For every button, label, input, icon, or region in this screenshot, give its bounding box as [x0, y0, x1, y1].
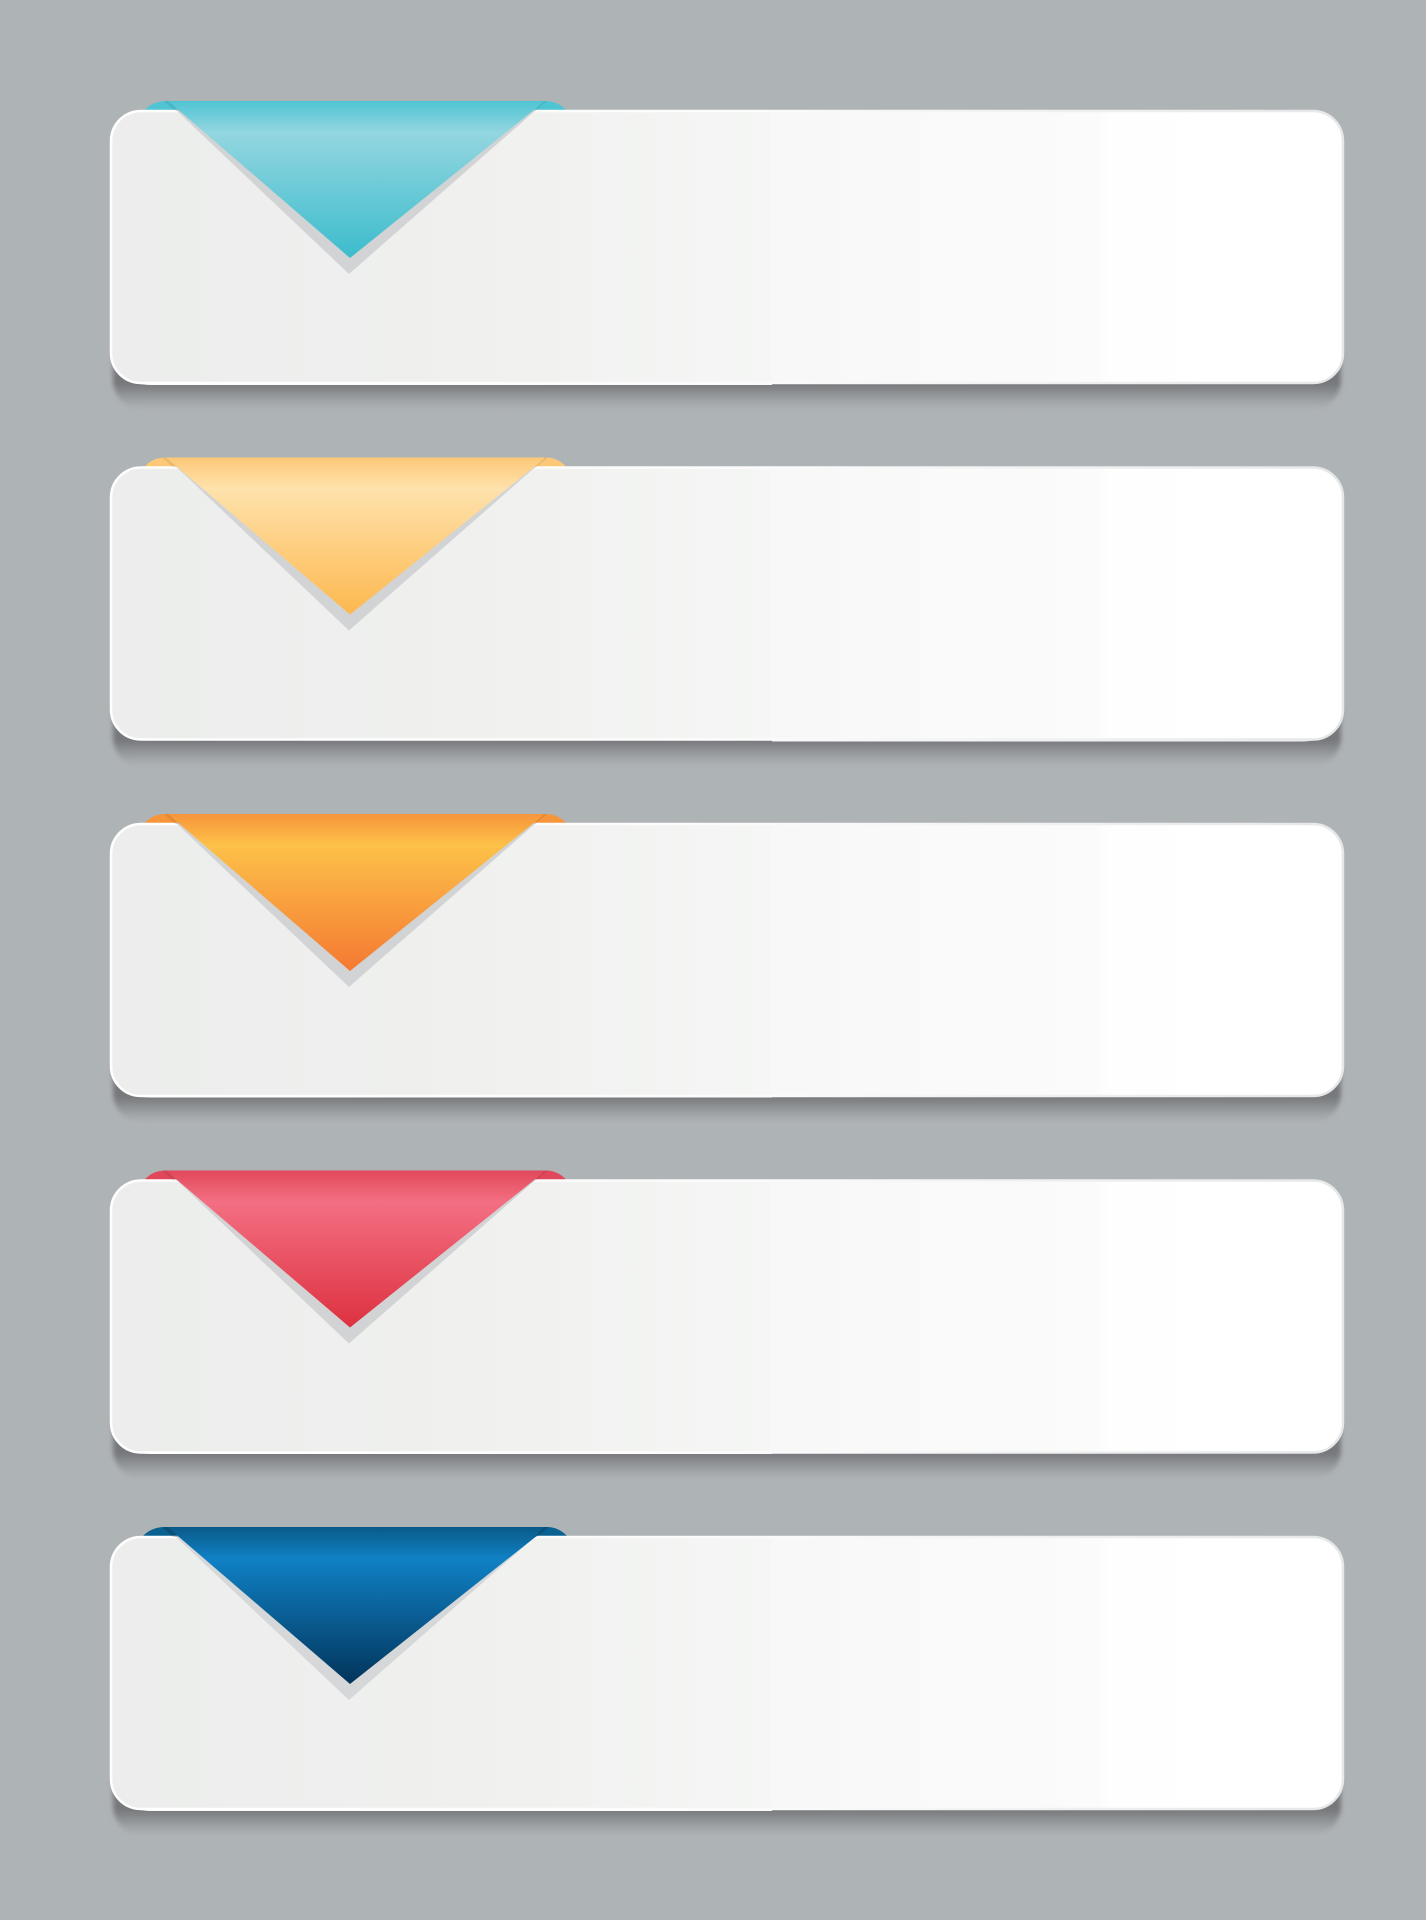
card 2 ribbon back	[144, 458, 567, 468]
card 4 ribbon triangle	[166, 1170, 546, 1328]
card 3 ribbon left fold	[164, 814, 180, 824]
card 1 left bottom seam strip	[132, 382, 772, 385]
panel: card 1 teal	[111, 101, 1343, 410]
card 3 body	[111, 824, 1343, 1096]
card 4 drop shadow	[113, 1400, 1341, 1480]
card 5 left bottom seam strip	[132, 1808, 772, 1811]
card 1 ribbon shadow	[176, 110, 536, 274]
card 5 ribbon back	[142, 1527, 568, 1537]
card 2 right bottom seam strip	[772, 738, 1322, 742]
card 5 ribbon shadow	[175, 1536, 536, 1700]
panel: card 2 amber	[111, 458, 1343, 768]
card 2 ribbon shadow	[176, 466, 536, 630]
card 3 ribbon back	[144, 814, 567, 824]
card 1 ribbon triangle	[168, 101, 545, 258]
card 5 drop shadow	[113, 1756, 1341, 1836]
card 3 ribbon shadow	[176, 823, 536, 987]
card 2 ribbon left fold	[162, 458, 178, 468]
card 2 drop shadow	[113, 686, 1341, 768]
card 2 body	[111, 468, 1343, 740]
card 1 body	[111, 111, 1343, 383]
card 4 left bottom seam strip	[132, 1452, 772, 1454]
card 3 ribbon triangle	[168, 814, 545, 971]
card 3 left bottom seam strip	[132, 1095, 772, 1098]
card 1 drop shadow	[113, 330, 1341, 410]
card 1 ribbon right fold	[533, 101, 547, 111]
panel: card 3 orange	[111, 814, 1343, 1123]
card 3 drop shadow	[113, 1043, 1341, 1123]
card 4 body	[111, 1180, 1343, 1452]
card 4 ribbon right fold	[534, 1170, 548, 1180]
panel: card 5 blue	[111, 1527, 1343, 1836]
card 5 ribbon right fold	[534, 1527, 549, 1537]
card 4 ribbon left fold	[162, 1170, 178, 1180]
card 1 ribbon left fold	[164, 101, 180, 111]
card 5 body	[111, 1537, 1343, 1809]
card 2 ribbon triangle	[166, 458, 546, 614]
panel: card 4 red	[111, 1170, 1343, 1480]
card 3 ribbon right fold	[533, 814, 547, 824]
card 5 ribbon triangle	[168, 1527, 548, 1684]
card 2 ribbon right fold	[534, 458, 548, 468]
card 1 ribbon back	[144, 101, 567, 111]
card 4 ribbon back	[144, 1170, 567, 1180]
card 5 ribbon left fold	[162, 1527, 179, 1537]
card 4 ribbon shadow	[176, 1180, 536, 1344]
